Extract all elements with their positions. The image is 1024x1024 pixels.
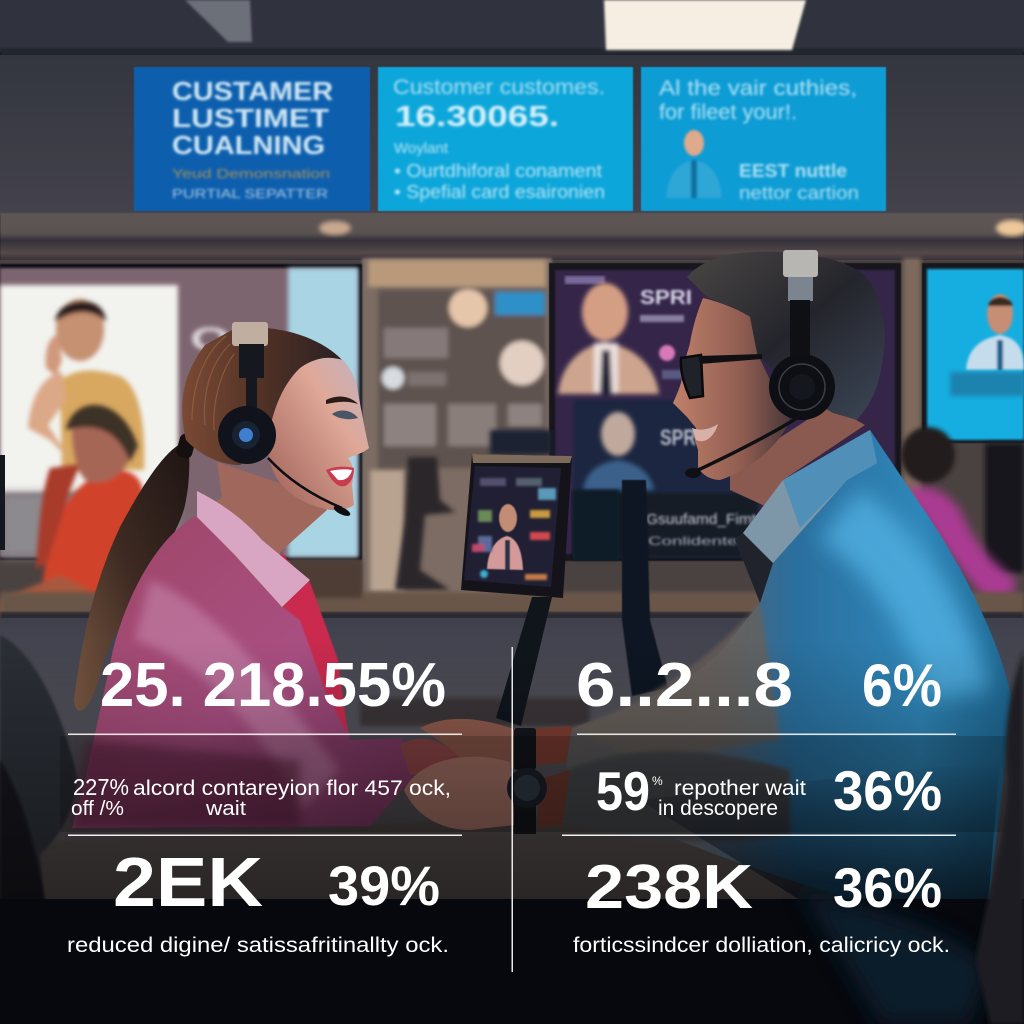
- panel: customer figures screen: • Ourtdhiforal conament: [394, 161, 602, 181]
- panel: agent promo screen: nettor cartion: [739, 183, 859, 203]
- hair strands: [192, 336, 234, 430]
- shirt lower fade: [640, 760, 1000, 940]
- glasses: [681, 354, 762, 398]
- figure: presenter on far right screen: [966, 294, 1024, 370]
- desk surface back: [0, 560, 1024, 903]
- monitor stand: rear: [622, 480, 668, 696]
- panel: customer figures screen: [378, 67, 633, 211]
- center wall board: [378, 289, 546, 590]
- open shirt: [735, 533, 773, 603]
- neck: [195, 462, 327, 610]
- stat note: 227% off: 227%: [73, 774, 129, 800]
- screen heading: SPRI: [640, 287, 692, 309]
- ear cup man: [769, 354, 835, 420]
- hair man back: [687, 252, 885, 420]
- mic boom man: [694, 418, 797, 472]
- woman agent: [72, 322, 415, 828]
- sleeve upper gray: [572, 603, 780, 760]
- left wall screen: [0, 264, 362, 655]
- stat: 59% note: [596, 760, 806, 822]
- red placket: [281, 552, 348, 735]
- collar man: [743, 430, 877, 563]
- face woman: [268, 358, 369, 510]
- panel: customer figures screen: 16.30065.: [395, 101, 559, 133]
- face man: [673, 298, 790, 480]
- stats panel: right column: [562, 651, 956, 957]
- mic boom woman: [268, 458, 342, 508]
- panel: agent promo screen: for fileet your!.: [659, 101, 797, 124]
- shelf ledge with lights: [0, 213, 1024, 263]
- inner monitor on right screen: [573, 400, 758, 558]
- middle wall: [0, 258, 1024, 630]
- headset band: [232, 322, 268, 410]
- lips woman: [326, 467, 354, 486]
- left wall screen: Ol: [190, 321, 245, 357]
- panel: customer figures screen: Customer customes.: [393, 76, 605, 99]
- stat note: 227% off: [71, 774, 451, 820]
- right wall screen: [549, 263, 901, 561]
- chair left: [0, 635, 78, 1024]
- stat: 59% note: 59: [596, 760, 650, 822]
- panel: customer title screen: [134, 67, 370, 211]
- figure: person in red on left screen: [0, 405, 143, 655]
- stat: 6%: 6%: [862, 652, 942, 719]
- stat note: 227% off: wait: [205, 798, 246, 820]
- figure: presenter on right screen: [558, 283, 659, 394]
- watch upper: [514, 728, 536, 770]
- stat: 6..2...8: 6..2...8: [576, 651, 793, 720]
- stat: 59% note: %: [652, 774, 663, 788]
- right chair: [976, 650, 1024, 1024]
- far right screen: [922, 263, 1024, 443]
- watch lower: [507, 768, 547, 834]
- panel: customer title screen: CUALNING: [172, 130, 325, 160]
- caption left: reduced digine/ satissafritinallty ock.: [67, 934, 449, 957]
- figure: person in yellow on left screen: [28, 299, 144, 470]
- collar: [197, 491, 310, 607]
- ear cup woman: [218, 406, 276, 464]
- shoulder highlight: [820, 490, 990, 700]
- screen heading: [640, 287, 692, 379]
- stat: 59% note: in descopere: [658, 797, 778, 820]
- headset band man: [783, 250, 818, 356]
- panel: customer title screen: PURTIAL SEPATTER: [172, 186, 328, 201]
- stat: 39%: 39%: [328, 854, 440, 917]
- shirt woman: [72, 515, 415, 828]
- caption right: forticssindcer dolliation, calicricy ock.: [573, 934, 950, 957]
- background worker in pink: [901, 427, 1024, 598]
- lower shirt shade: [72, 740, 300, 828]
- stat: 2EK: 2EK: [113, 843, 263, 921]
- panel: agent promo screen: [641, 67, 886, 211]
- panel: customer title screen: LUSTIMET: [172, 103, 329, 133]
- neck man: [730, 405, 865, 533]
- ponytail: [74, 442, 189, 711]
- lips man: [692, 424, 718, 441]
- eye woman: [332, 411, 358, 419]
- teeth woman: [330, 469, 352, 480]
- stat: 59% note: repother wait: [674, 777, 806, 800]
- small monitor body: [461, 454, 572, 598]
- panel: customer figures screen: Woylant: [394, 140, 449, 157]
- back wall: [0, 55, 1024, 215]
- panel: customer title screen: CUSTAMER: [172, 76, 333, 106]
- man agent: [558, 250, 1012, 940]
- hair head: [182, 328, 344, 465]
- hands: [400, 719, 572, 834]
- center divider: [512, 647, 513, 972]
- panel: customer title screen: Yeud Demonsnation: [172, 166, 330, 181]
- sleeve highlight: [135, 580, 340, 810]
- panel: customer figures screen: • Spefial card esaironien: [394, 182, 605, 202]
- inner monitor on right screen: SPR: [660, 425, 696, 450]
- ceiling: [0, 0, 1024, 56]
- inner monitor on right screen: Conlidented: [648, 534, 748, 548]
- stat: 238K: 238K: [585, 853, 753, 922]
- lower forearm sleeve: [558, 751, 790, 841]
- inner monitor on right screen: Gsuufamd_Fimt: [646, 511, 757, 528]
- icon: agent figure on promo screen: [666, 130, 722, 198]
- bottom darkness: [0, 640, 1024, 1024]
- panel: agent promo screen: Al the vair cuthies,: [659, 77, 857, 100]
- stat: 36% upper: 36%: [833, 759, 942, 822]
- monitor presenter: [487, 504, 523, 570]
- panel: agent promo screen: EEST nuttle: [739, 161, 847, 181]
- brow woman: [326, 397, 358, 404]
- stats panel: left column: [67, 651, 462, 957]
- shirt man: [558, 430, 1012, 940]
- monitor stand: front: [496, 597, 552, 726]
- desk monitors and stands: [461, 430, 668, 726]
- stat note: 227% off: off /%: [71, 798, 124, 820]
- stat: 36% lower: 36%: [833, 856, 942, 919]
- shadow figure on board: [395, 457, 455, 590]
- stat: 25.218.55%: 25. 218.55%: [100, 651, 446, 720]
- stat note: 227% off: alcord contareyion flor 457 ock,: [133, 777, 451, 800]
- monitor widgets: [472, 478, 556, 580]
